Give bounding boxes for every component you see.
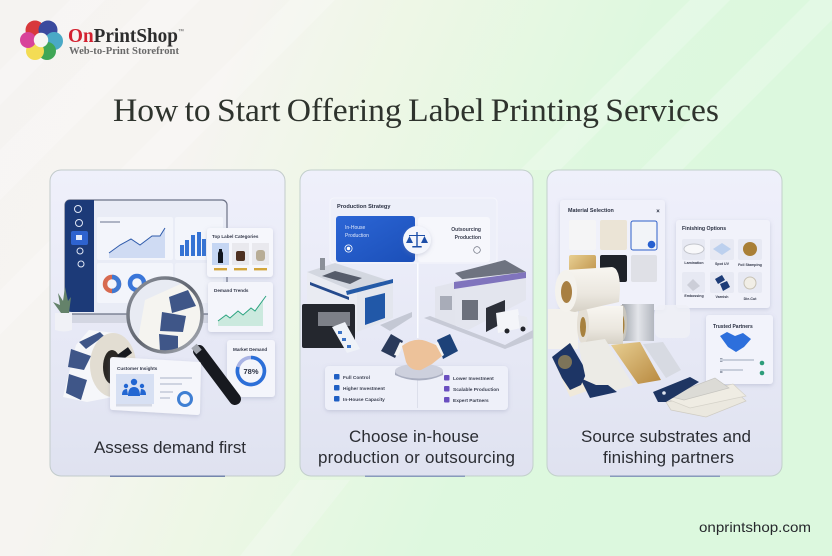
printing machine bbox=[302, 304, 360, 353]
card label: finishing partners bbox=[603, 448, 734, 467]
production strategy panel bbox=[330, 198, 497, 263]
top label categories card: Top Label Categories bbox=[212, 234, 259, 239]
option: in-house bbox=[336, 216, 415, 262]
card label: Assess demand first bbox=[94, 438, 246, 457]
checklist panel: Full Control bbox=[343, 375, 370, 381]
checklist panel: Expert Partners bbox=[453, 398, 489, 404]
finishing options panel bbox=[676, 220, 770, 308]
outsourcing warehouse bbox=[424, 260, 533, 349]
finishing options panel: Varnish bbox=[716, 295, 728, 299]
icon: colour flower bbox=[20, 20, 63, 60]
finishing options panel: Die-Cut bbox=[744, 297, 757, 301]
option: in-house: Production bbox=[345, 233, 369, 239]
icon: blue handshake bbox=[720, 332, 751, 352]
finishing options panel: Spot UV bbox=[715, 262, 730, 266]
panel: substrates and partners bbox=[547, 170, 782, 477]
card label: Source substrates and bbox=[581, 427, 751, 446]
checklist panel bbox=[325, 366, 508, 410]
top label categories card bbox=[207, 228, 273, 277]
checklist panel: Lower Investment bbox=[453, 376, 494, 382]
panel: production choice bbox=[300, 170, 533, 477]
finishing options panel: Lamination bbox=[684, 261, 704, 265]
trademark: ™ bbox=[178, 28, 184, 35]
card label bbox=[318, 427, 515, 467]
option: outsourcing bbox=[418, 217, 490, 262]
logo bbox=[20, 20, 184, 60]
line chart panel bbox=[97, 217, 173, 260]
title: How to Start Offering Label Printing Services bbox=[113, 93, 719, 129]
demand trends card bbox=[208, 282, 273, 332]
customer insights card bbox=[110, 357, 201, 415]
logo tagline: Web-to-Print Storefront bbox=[69, 46, 180, 57]
icon: handshake bbox=[381, 334, 458, 370]
trusted partners card: Trusted Partners bbox=[713, 324, 753, 330]
demand trends card: Demand Trends bbox=[214, 288, 249, 293]
logo wordmark: OnPrintShop bbox=[68, 25, 178, 47]
in-house factory bbox=[307, 258, 412, 332]
swatch fan bbox=[653, 377, 746, 417]
magnifying glass bbox=[119, 278, 235, 399]
finishing options panel: Foil Stamping bbox=[738, 263, 762, 267]
checklist panel: Higher Investment bbox=[343, 386, 385, 392]
pedestal bbox=[395, 364, 443, 380]
trusted partners card bbox=[706, 315, 773, 384]
icon: potted plant bbox=[53, 287, 72, 332]
finishing options panel: Finishing Options bbox=[682, 226, 726, 232]
clear film roll bbox=[655, 305, 690, 338]
label roll bbox=[63, 330, 136, 402]
icon: delivery truck bbox=[496, 309, 528, 334]
card label bbox=[581, 427, 751, 467]
donut panel bbox=[97, 263, 223, 303]
card label: production or outsourcing bbox=[318, 448, 515, 467]
vertical divider bbox=[417, 262, 418, 338]
customer insights card: Customer Insights bbox=[117, 366, 158, 371]
panel: assess demand bbox=[50, 170, 285, 477]
icon: balance scale bbox=[403, 226, 431, 254]
option: outsourcing: Outsourcing bbox=[451, 227, 481, 233]
finishing options panel: Embossing bbox=[684, 294, 704, 298]
option: in-house: In-House bbox=[345, 225, 366, 231]
market demand card bbox=[227, 340, 275, 397]
label material rolls bbox=[548, 267, 654, 349]
icon: people bbox=[122, 379, 146, 396]
material selection panel: Material Selection bbox=[568, 208, 614, 214]
material selection panel: × bbox=[656, 209, 660, 215]
checklist panel: Scalable Production bbox=[453, 387, 499, 393]
market demand card: 78% bbox=[243, 367, 259, 376]
material selection panel bbox=[560, 200, 665, 310]
option: outsourcing: Production bbox=[455, 235, 481, 241]
website url: onprintshop.com bbox=[699, 519, 811, 535]
card label: Choose in-house bbox=[349, 427, 479, 446]
monitor dashboard bbox=[65, 200, 227, 323]
market demand card: Market Demand bbox=[233, 347, 267, 352]
production strategy panel: Production Strategy bbox=[337, 204, 391, 210]
sidebar bbox=[65, 200, 94, 312]
checklist panel: In-House Capacity bbox=[343, 397, 385, 403]
sample label cards bbox=[552, 339, 681, 398]
bar chart panel bbox=[175, 217, 223, 260]
